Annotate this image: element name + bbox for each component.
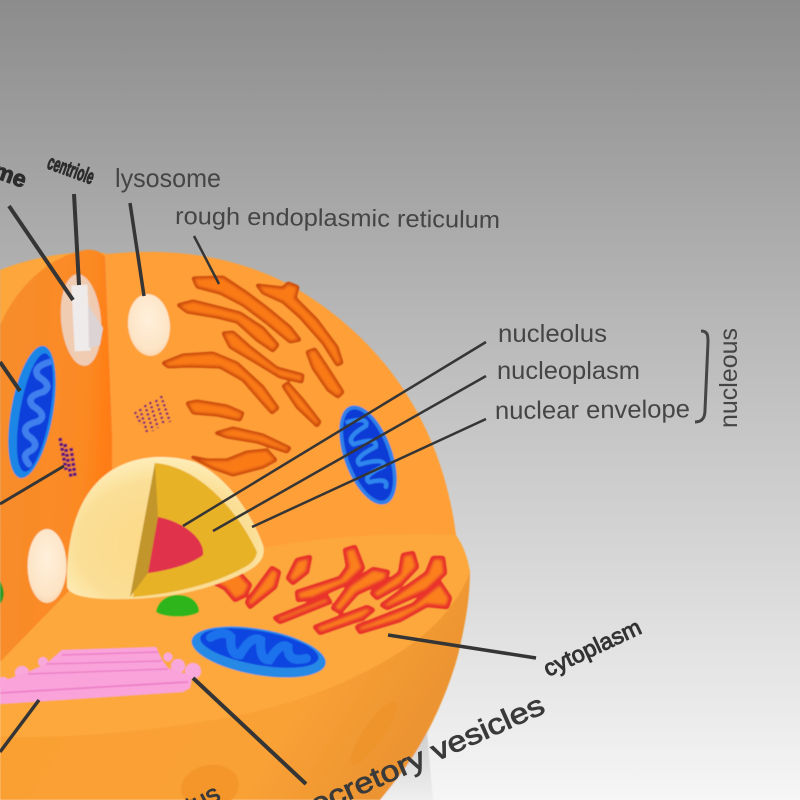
- ribosomes on back wall: [135, 396, 170, 432]
- label: rough endoplasmic reticulum: rough endoplasmic reticulum: [175, 203, 500, 234]
- rough endoplasmic reticulum: [163, 277, 343, 475]
- lysosome, back wall: [125, 292, 173, 358]
- lysosome, left wall: [28, 529, 66, 603]
- label: lysosome: lysosome: [115, 163, 221, 193]
- nuclear dome: [67, 457, 264, 599]
- golgi stack lines: [0, 652, 188, 693]
- golgi vesicles: [0, 652, 201, 689]
- cut: right face: [133, 463, 257, 597]
- label: nucleous: nucleous: [715, 328, 743, 428]
- centriole: [57, 272, 105, 368]
- mitochondrion, right: [328, 398, 408, 512]
- green vesicle, far left: [0, 581, 4, 604]
- smooth endoplasmic reticulum: [213, 547, 450, 633]
- cell lower outer body: [0, 570, 470, 800]
- label: nucleoplasm: nucleoplasm: [497, 357, 640, 385]
- mitochondrion, floor: [188, 618, 330, 686]
- green vesicle on floor: [156, 595, 199, 616]
- pedestal under the cell: [380, 733, 433, 800]
- cell back wall, right quarter: [100, 252, 456, 600]
- golgi base: [0, 647, 192, 704]
- ribosomes on left wall: [60, 438, 75, 477]
- cell flat cut surface: [0, 534, 470, 737]
- icon: secretory vesicle dimple, bottom: [178, 760, 242, 800]
- nucleolus: [148, 517, 203, 573]
- label: cytoplasm: cytoplasm: [539, 614, 645, 682]
- label: centriole: centriole: [44, 151, 97, 189]
- icon: secretory vesicle dimple, right: [344, 696, 404, 770]
- golgi apparatus: [0, 647, 201, 704]
- label: nuclear envelope: nuclear envelope: [495, 395, 690, 425]
- label: nucleolus: nucleolus: [498, 320, 607, 348]
- cell left cut wall: [0, 250, 112, 662]
- bracket: nucleus group: [695, 331, 708, 422]
- nucleus: [67, 457, 264, 599]
- cell illustration: [0, 250, 470, 800]
- leader lines: [0, 194, 536, 784]
- upper left outer shell: [0, 252, 105, 360]
- mitochondrion, left wall: [0, 342, 64, 482]
- cut: dark face: [130, 463, 158, 597]
